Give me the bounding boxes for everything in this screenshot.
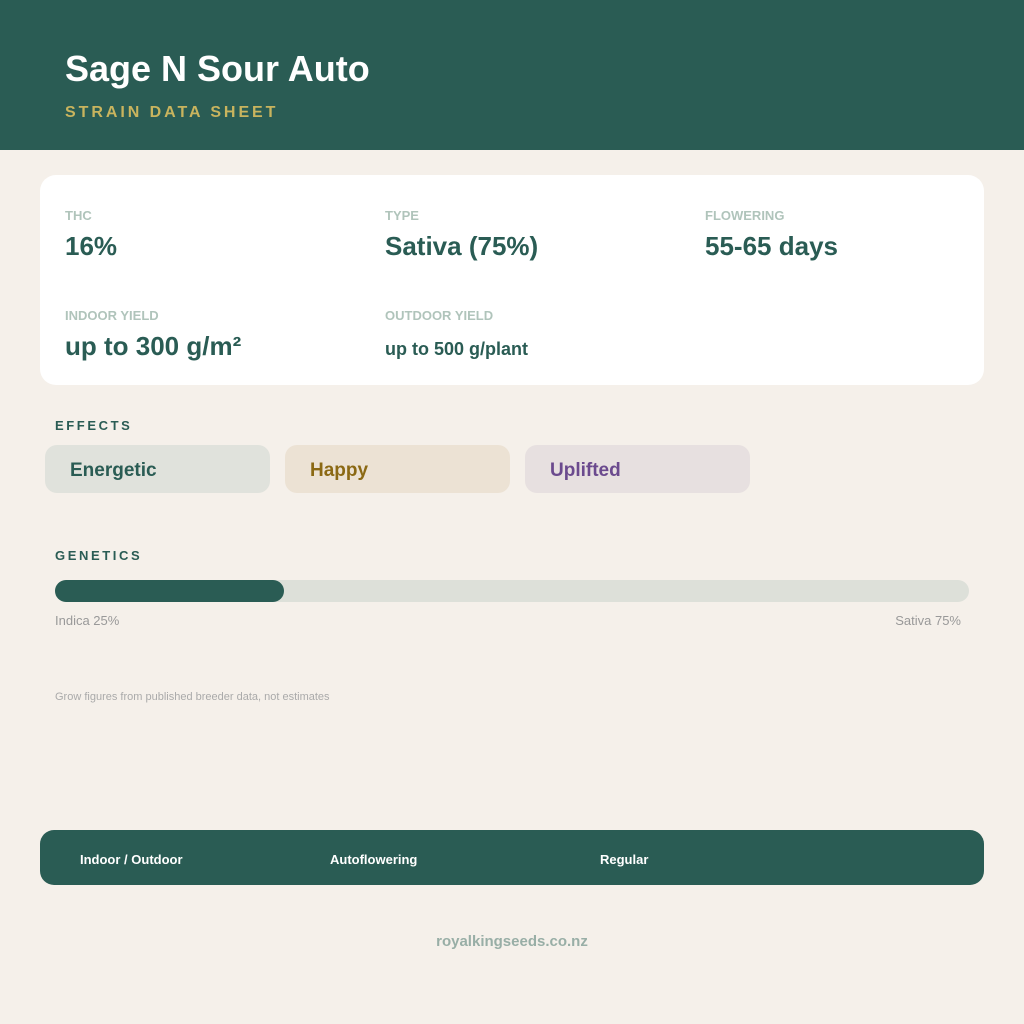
title: Sage N Sour Auto (65, 48, 370, 89)
heading: effects: EFFECTS (55, 418, 132, 433)
footnote: Grow figures from published breeder data, not estimates (55, 691, 330, 703)
genetics bar (55, 580, 969, 602)
pill: happy (285, 445, 510, 493)
subtitle: STRAIN DATA SHEET (65, 104, 278, 121)
pill: energetic: Energetic (70, 460, 157, 481)
stat: THC (65, 208, 117, 261)
stat: flowering: 55-65 days (705, 231, 838, 261)
stat: type: TYPE (385, 208, 419, 223)
stat: indoor yield (65, 308, 241, 361)
attribute: regular: Regular (600, 852, 648, 867)
attributes bar (40, 830, 984, 885)
attribute: environment: Indoor / Outdoor (80, 852, 183, 867)
label: sativa: Sativa 75% (895, 613, 961, 628)
stat: flowering: FLOWERING (705, 208, 784, 223)
attribute: autoflowering: Autoflowering (330, 852, 417, 867)
stat: indoor yield: up to 300 g/m² (65, 331, 241, 361)
header band (0, 0, 1024, 150)
pill: happy: Happy (310, 460, 368, 481)
stat: THC: THC (65, 208, 92, 223)
panel: strain stats (40, 175, 984, 385)
label: indica: Indica 25% (55, 613, 119, 628)
website: royalkingseeds.co.nz (436, 933, 588, 950)
pill: uplifted: Uplifted (550, 460, 621, 481)
stat: outdoor yield: up to 500 g/plant (385, 339, 528, 359)
pill: uplifted (525, 445, 750, 493)
stat: indoor yield: INDOOR YIELD (65, 308, 159, 323)
stat: outdoor yield (385, 308, 528, 359)
stat: type (385, 208, 538, 261)
stat: type: Sativa (75%) (385, 231, 538, 261)
stat: flowering (705, 208, 838, 261)
pill: energetic (45, 445, 270, 493)
heading: genetics: GENETICS (55, 548, 142, 563)
stat: outdoor yield: OUTDOOR YIELD (385, 308, 493, 323)
stat: THC: 16% (65, 231, 117, 261)
indica fill (55, 580, 284, 602)
